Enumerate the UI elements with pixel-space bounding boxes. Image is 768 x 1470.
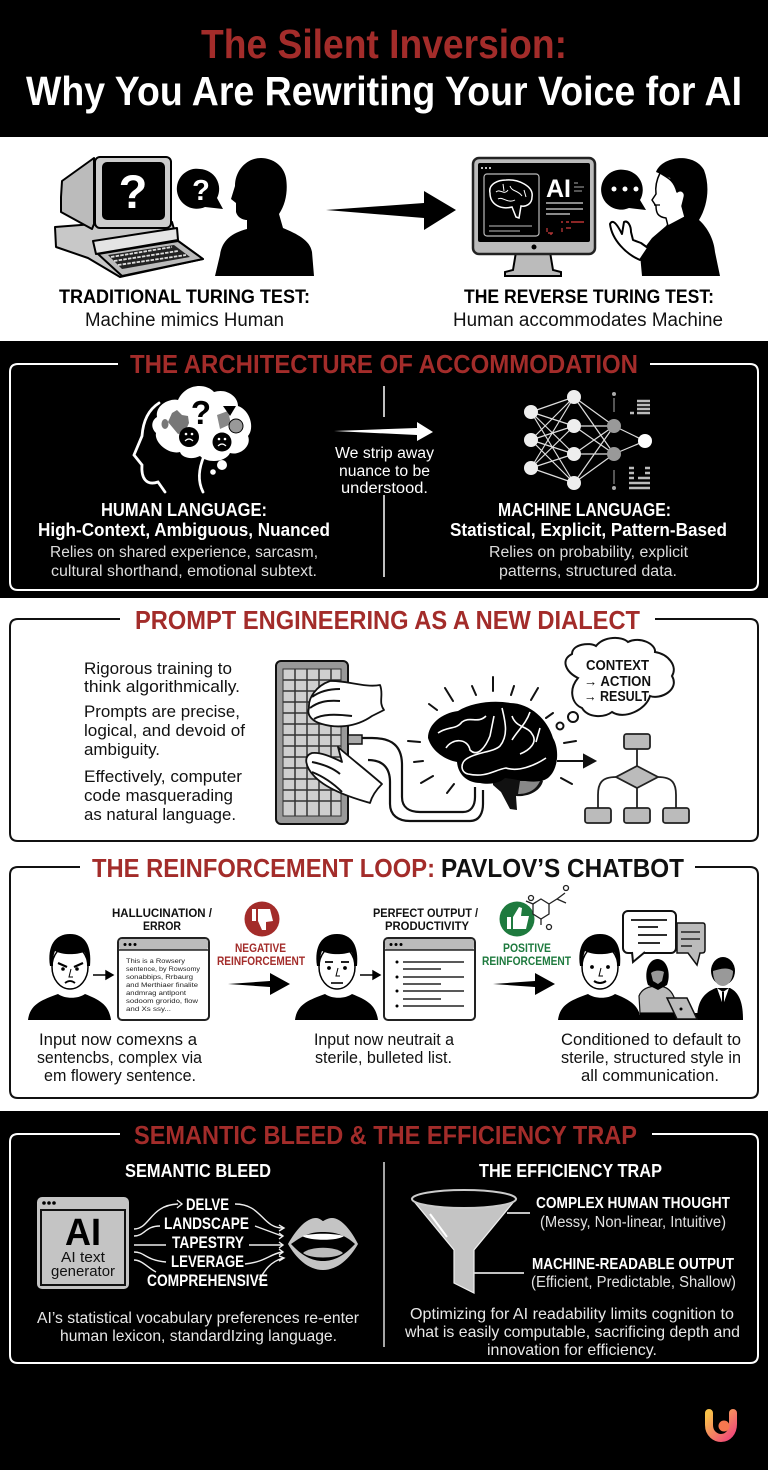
label: positive reinforcement: POSITIVE <box>503 941 551 955</box>
label: hallucination: HALLUCINATION / <box>112 908 213 920</box>
caption: efficiency trap <box>404 1306 740 1359</box>
text: funnel labels: (Messy, Non-linear, Intuitive) <box>540 1214 726 1231</box>
text: prompt description: think algorithmically. <box>84 678 240 696</box>
word flow: TAPESTRY <box>172 1233 245 1252</box>
icon: question bubble <box>177 169 223 209</box>
caption: semantic bleed: human lexicon, standardIzing language. <box>60 1328 337 1345</box>
icon: AI text generator <box>37 1197 129 1289</box>
label: negative reinforcement: REINFORCEMENT <box>217 954 306 968</box>
label: traditional turing test: TRADITIONAL TURING TEST: <box>59 287 310 308</box>
label: traditional turing test <box>59 287 310 331</box>
label: hallucination: ERROR <box>143 921 182 933</box>
label: perfect output: PERFECT OUTPUT / <box>373 908 479 920</box>
panel: semantic bleed and efficiency trap <box>10 1120 758 1363</box>
label: traditional turing test: Machine mimics Human <box>85 310 284 331</box>
word flow: LANDSCAPE <box>164 1214 249 1233</box>
text: prompt description: as natural language. <box>84 806 236 824</box>
text: funnel labels: COMPLEX HUMAN THOUGHT <box>536 1195 730 1212</box>
icon: logo <box>709 1413 733 1438</box>
word flow <box>134 1195 284 1290</box>
icon: frustrated person <box>28 934 111 1020</box>
icon: brain <box>408 677 576 810</box>
caption: efficiency trap: what is easily computable, sacrificing depth and <box>404 1324 740 1341</box>
text: human language <box>38 500 330 580</box>
caption: step 1: em flowery sentence. <box>44 1066 196 1085</box>
arrow: brain to flowchart <box>557 755 595 767</box>
arrow: negative to neutral <box>228 973 290 995</box>
caption: step 1: Input now comexns a <box>39 1030 198 1049</box>
panel: turing tests <box>55 157 723 331</box>
text: funnel labels: (Efficient, Predictable, Shallow) <box>531 1274 736 1291</box>
word flow: DELVE <box>186 1195 229 1214</box>
window: bulleted list <box>384 938 475 1020</box>
text: machine language: Relies on probability, explicit <box>489 544 689 561</box>
icon: retro computer <box>55 157 203 277</box>
window: flowery output: This is a Rowsery <box>126 958 186 965</box>
text: prompt description: ambiguity. <box>84 741 160 759</box>
icon: question bubble: ? <box>192 175 210 207</box>
label: reverse turing test: Human accommodates Machine <box>453 310 723 331</box>
icon: human head with thoughts <box>134 386 251 492</box>
arrow: positive to conditioned <box>493 973 555 995</box>
caption: strip away: understood. <box>341 480 428 497</box>
icon: talking person <box>610 158 720 276</box>
word flow: LEVERAGE <box>171 1252 244 1271</box>
text: prompt description: code masquerading <box>84 787 233 805</box>
text: human language: cultural shorthand, emotional subtext. <box>51 563 317 580</box>
text: funnel labels: MACHINE-READABLE OUTPUT <box>532 1256 734 1273</box>
caption: step 3: all communication. <box>581 1066 719 1085</box>
label: negative reinforcement: NEGATIVE <box>235 941 286 955</box>
text: prompt description: Effectively, computer <box>84 768 243 786</box>
window: flowery output: and Merthiaer finalite <box>126 982 198 989</box>
caption: step 1 <box>37 1030 203 1085</box>
icon: thought cloud <box>556 638 674 730</box>
label: hallucination <box>112 908 213 933</box>
arrow: test inversion <box>326 191 456 230</box>
subheading: semantic bleed: SEMANTIC BLEED <box>125 1161 271 1181</box>
heading: reinforcement loop <box>92 853 684 883</box>
icon: thumbs down <box>244 902 280 936</box>
window: flowery output: sodoom grorido, flow <box>126 998 198 1005</box>
icon: lips <box>288 1218 358 1270</box>
text: machine language <box>450 500 727 580</box>
text: prompt description <box>84 660 245 824</box>
text: human language: Relies on shared experience, sarcasm, <box>50 544 318 561</box>
icon: molecule <box>526 886 568 930</box>
icon: keyboard with hands <box>276 661 483 824</box>
label: positive reinforcement: REINFORCEMENT <box>482 954 572 968</box>
window: flowery output: andmrag antlpont <box>126 990 186 997</box>
icon: AI text generator: generator <box>51 1263 115 1280</box>
caption: step 2: sterile, bulleted list. <box>315 1048 452 1067</box>
text: funnel labels <box>531 1195 736 1291</box>
caption: efficiency trap: Optimizing for AI readability limits cognition to <box>410 1306 734 1323</box>
caption: step 3 <box>561 1030 741 1085</box>
text: prompt description: Rigorous training to <box>84 660 232 678</box>
label: perfect output: PRODUCTIVITY <box>385 921 469 933</box>
text: machine language: patterns, structured data. <box>499 563 677 580</box>
window: flowery output <box>118 938 209 1020</box>
heading: architecture: THE ARCHITECTURE OF ACCOMMODATION <box>130 349 638 379</box>
arrow: small <box>360 971 380 979</box>
window: flowery output: and Xs ssy... <box>126 1006 171 1013</box>
heading: semantic bleed: SEMANTIC BLEED & THE EFFICIENCY TRAP <box>134 1120 637 1150</box>
panel: prompt engineering <box>10 605 758 841</box>
text: machine language: MACHINE LANGUAGE: <box>498 500 671 520</box>
icon: neural network <box>524 390 652 490</box>
caption: strip away <box>335 445 434 497</box>
icon: speech bubble <box>601 170 646 210</box>
icon: AI monitor <box>473 158 595 276</box>
text: human language: High-Context, Ambiguous, Nuanced <box>38 520 330 540</box>
panel: architecture of accommodation <box>10 349 758 590</box>
icon: AI monitor: AI <box>546 175 571 203</box>
text: prompt description: logical, and devoid of <box>84 722 245 740</box>
icon: conditioned group <box>558 911 743 1020</box>
label: reverse turing test: THE REVERSE TURING TEST: <box>464 287 714 308</box>
icon: human silhouette <box>215 158 314 276</box>
heading: prompt engineering: PROMPT ENGINEERING AS A NEW DIALECT <box>135 605 640 635</box>
caption: strip away: nuance to be <box>339 463 430 480</box>
text: human language: HUMAN LANGUAGE: <box>101 500 267 520</box>
heading: reinforcement loop: PAVLOV’S CHATBOT <box>441 853 684 883</box>
icon: flowchart <box>585 734 689 823</box>
label: reverse turing test <box>453 287 723 331</box>
icon: thought cloud: CONTEXT <box>586 658 649 674</box>
caption: semantic bleed <box>37 1310 360 1345</box>
icon: thumbs up <box>500 902 534 936</box>
icon: AI text generator: AI text <box>61 1249 106 1266</box>
caption: strip away: We strip away <box>335 445 434 462</box>
caption: step 1: sentencbs, complex via <box>37 1048 203 1067</box>
caption: step 2: Input now neutrait a <box>314 1030 455 1049</box>
caption: efficiency trap: innovation for efficiency. <box>487 1342 657 1359</box>
caption: semantic bleed: AI’s statistical vocabulary preferences re-enter <box>37 1310 360 1327</box>
text: prompt description: Prompts are precise, <box>84 703 240 721</box>
heading: reinforcement loop: THE REINFORCEMENT LOOP: <box>92 853 435 883</box>
icon: neutral person <box>295 934 378 1020</box>
caption: step 3: sterile, structured style in <box>561 1048 741 1067</box>
caption: step 2 <box>314 1030 455 1067</box>
icon: thought cloud: → RESULT <box>584 689 649 705</box>
title <box>26 21 742 114</box>
window: flowery output: sentence, by Rowsomy <box>126 966 201 973</box>
icon: funnel <box>412 1190 530 1293</box>
title: The Silent Inversion: <box>201 21 567 67</box>
icon: AI text generator: AI <box>65 1212 101 1254</box>
panel: reinforcement loop <box>10 853 758 1098</box>
text: machine language: Statistical, Explicit, Pattern-Based <box>450 520 727 540</box>
caption: step 3: Conditioned to default to <box>561 1030 741 1049</box>
arrow: strip nuance <box>334 422 433 441</box>
label: perfect output <box>373 908 479 933</box>
arrow: small <box>93 971 113 979</box>
word flow: COMPREHENSIVE <box>147 1271 268 1290</box>
window: flowery output: sonabbips, Rrbaurg <box>126 974 193 981</box>
icon: human head with thoughts: ? <box>191 394 211 431</box>
label: negative reinforcement <box>217 941 306 968</box>
subheading: efficiency trap: THE EFFICIENCY TRAP <box>479 1161 662 1181</box>
panel: turing tests: ? <box>119 165 147 218</box>
label: positive reinforcement <box>482 941 572 968</box>
icon: thought cloud: → ACTION <box>584 674 651 690</box>
